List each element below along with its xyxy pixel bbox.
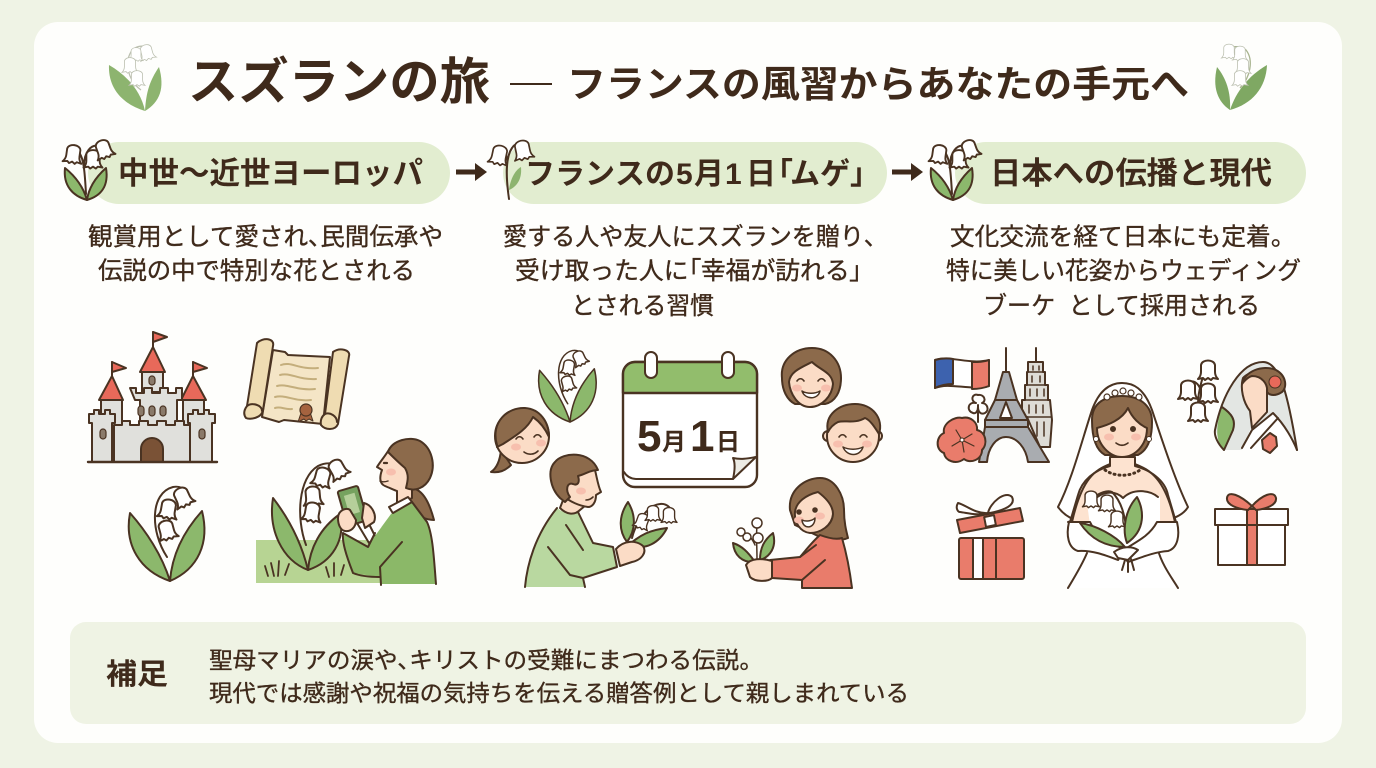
illustration: gift box with ribbon: [1215, 494, 1288, 565]
description 1: 観賞用として愛され、民間伝承や: [88, 223, 443, 251]
description 3: [946, 223, 1301, 320]
description 2: 受け取った人に「幸福が訪れる」: [515, 257, 862, 285]
description 3: ブーケ として採用される: [983, 292, 1260, 320]
face: boy right: [823, 404, 882, 462]
description 1: [88, 223, 443, 285]
arrow 1: [456, 163, 487, 181]
description 2: とされる習慣: [571, 292, 714, 320]
illustration: parchment scroll: [244, 339, 349, 429]
calendar date: [637, 412, 740, 461]
calendar date: 月: [662, 429, 686, 456]
description 3: 特に美しい花姿からウェディング: [946, 257, 1301, 285]
column 2: French May Day: [487, 139, 887, 588]
illustration: kimono bride: [1215, 362, 1297, 453]
icon: pill lily 1: [62, 137, 116, 200]
heading pill 1: [88, 142, 450, 204]
icon: title lily left: [109, 43, 161, 111]
illustration: lily: [539, 348, 596, 422]
heading 1: 中世〜近世ヨーロッパ: [118, 156, 423, 191]
face: girl left: [491, 408, 549, 472]
heading pill 2: [503, 142, 887, 204]
arrow 2: [892, 163, 923, 181]
panel background: [70, 622, 1306, 724]
icon: title lily right: [1215, 44, 1267, 110]
heading 2: フランスの5月1日「ムゲ」: [525, 158, 880, 191]
description 2: 愛する人や友人にスズランを贈り、: [503, 223, 876, 251]
illustration: woman with phone and lily: [256, 439, 436, 585]
description 2: [503, 223, 876, 320]
supplement text: [209, 647, 909, 706]
calendar date: 5: [637, 412, 661, 461]
illustration: castle: [88, 332, 217, 462]
main title: スズランの旅: [188, 54, 490, 110]
column 3: Japan and today: [928, 137, 1306, 588]
title dash: [510, 83, 552, 85]
icon: pill lily 3: [928, 137, 982, 200]
supplement label: 補足: [106, 658, 168, 691]
subtitle: フランスの風習からあなたの手元へ: [567, 64, 1189, 105]
calendar date: 1: [690, 412, 714, 461]
illustration: bride with bouquet: [1058, 383, 1188, 588]
illustration: calendar: [623, 352, 757, 487]
illustration: lily sprig: [1178, 360, 1218, 422]
heading 3: 日本への伝播と現代: [990, 156, 1272, 191]
title block: [109, 43, 1267, 111]
supplement panel: [70, 622, 1306, 724]
figure: girl receiving lily: [733, 478, 852, 588]
supplement text: 現代では感謝や祝福の気持ちを伝える贈答例として親しまれている: [209, 680, 909, 706]
calendar date: 日: [716, 429, 740, 456]
illustration: lily of the valley: [129, 484, 204, 581]
description 3: 文化交流を経て日本にも定着。: [950, 223, 1283, 251]
figure: boy giving lily: [525, 455, 677, 587]
illustration: red flower: [938, 418, 985, 462]
icon: pill lily 2: [487, 139, 535, 199]
column 1: medieval Europe: [62, 137, 450, 585]
supplement text: 聖母マリアの涙や、キリストの受難にまつわる伝説 。: [209, 647, 751, 673]
description 1: 伝説の中で特別な花とされる: [98, 257, 415, 285]
illustration: clover: [969, 395, 988, 422]
illustration: French flag: [935, 358, 989, 389]
heading pill 3: [955, 142, 1306, 204]
illustration: open gift box: [957, 495, 1024, 579]
face: woman right: [782, 348, 841, 407]
illustration: Eiffel tower: [979, 348, 1049, 462]
illustration: leaning tower: [1022, 348, 1052, 447]
